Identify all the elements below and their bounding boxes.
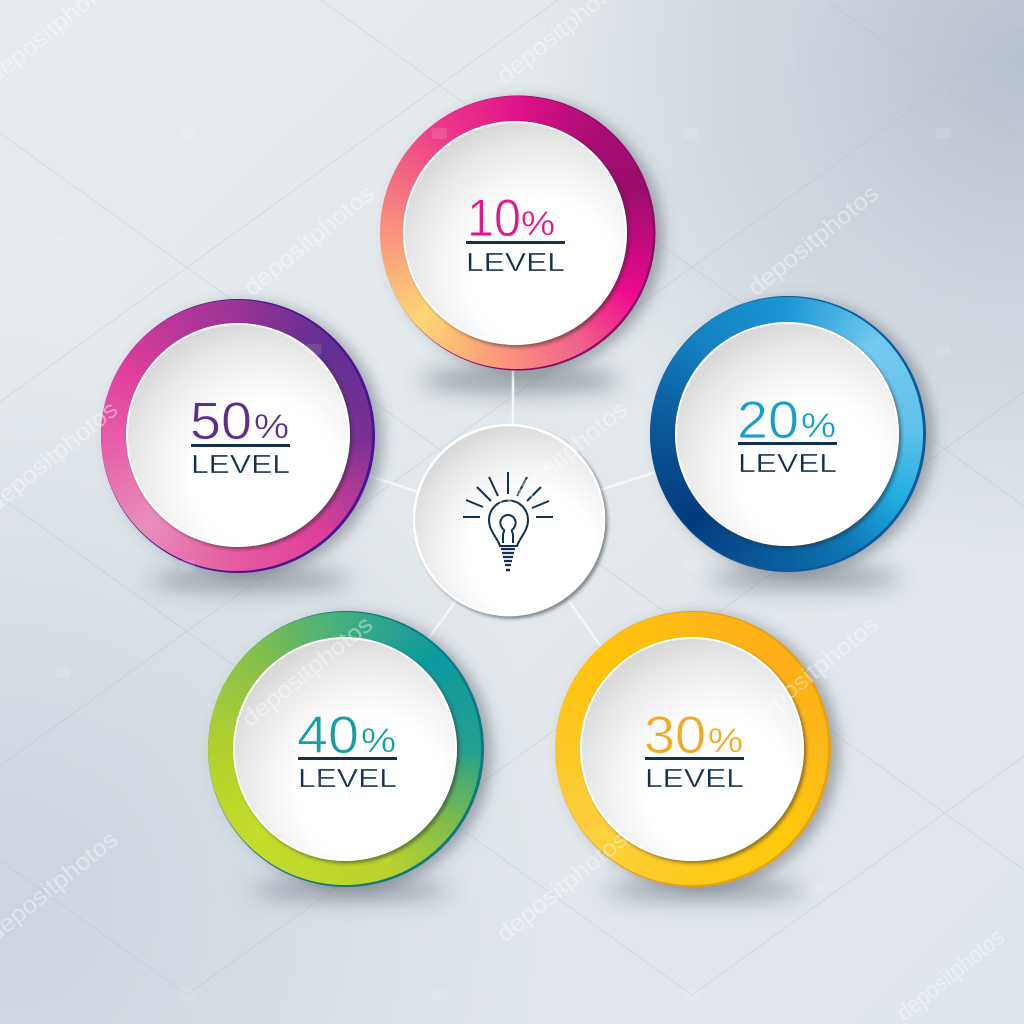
percent label xyxy=(190,392,289,451)
level label: LEVEL xyxy=(645,763,744,793)
watermark: depositphotos xyxy=(892,924,1010,1024)
level label: LEVEL xyxy=(466,247,565,277)
divider xyxy=(466,241,565,244)
center circle xyxy=(414,425,604,615)
percent label xyxy=(737,391,836,450)
percent label xyxy=(644,706,743,765)
watermark: depositphotos xyxy=(237,611,378,733)
percent label: % xyxy=(801,407,836,445)
ring rim xyxy=(555,611,831,887)
ring rim xyxy=(650,296,926,572)
icon: light bulb xyxy=(463,472,553,570)
disc xyxy=(676,323,898,545)
ring rim xyxy=(101,299,375,573)
ring rim xyxy=(380,96,656,370)
disc xyxy=(234,638,456,860)
panel: 50% level xyxy=(100,299,375,573)
connectors xyxy=(370,368,656,648)
percent label: 50 xyxy=(190,392,252,451)
watermark: depositphotos xyxy=(492,826,633,948)
ring xyxy=(554,612,828,884)
disc xyxy=(404,122,626,344)
ring xyxy=(380,96,652,368)
level label: LEVEL xyxy=(738,448,837,478)
percent label: % xyxy=(361,722,396,760)
divider xyxy=(298,757,397,760)
panel: 30% level xyxy=(554,611,831,887)
ring xyxy=(208,612,480,884)
percent label xyxy=(467,189,555,248)
disc xyxy=(127,324,349,546)
level label: LEVEL xyxy=(298,763,397,793)
percent label: 10 xyxy=(467,189,521,248)
percent label: % xyxy=(521,205,555,243)
panel: 10% level xyxy=(380,96,656,370)
panel: 40% level xyxy=(208,611,484,887)
percent label: % xyxy=(708,722,743,760)
watermark: depositphotos xyxy=(239,180,380,302)
watermark: depositphotos xyxy=(743,180,884,302)
ring xyxy=(100,300,372,570)
ring rim xyxy=(208,611,484,887)
panel: 20% level xyxy=(650,296,926,572)
ground shadows xyxy=(150,367,900,900)
watermark: depositphotos xyxy=(492,396,633,518)
level label: LEVEL xyxy=(191,449,290,479)
divider xyxy=(738,442,837,445)
percent label: % xyxy=(254,408,289,446)
divider xyxy=(191,444,290,447)
percent label xyxy=(297,706,396,765)
watermark camera marks xyxy=(55,128,951,1001)
percent label: 40 xyxy=(297,706,359,765)
ring xyxy=(650,296,922,570)
percent label: 30 xyxy=(644,706,706,765)
divider xyxy=(645,757,744,760)
watermark: depositphotos xyxy=(743,611,884,733)
disc xyxy=(581,638,803,860)
percent label: 20 xyxy=(737,391,799,450)
